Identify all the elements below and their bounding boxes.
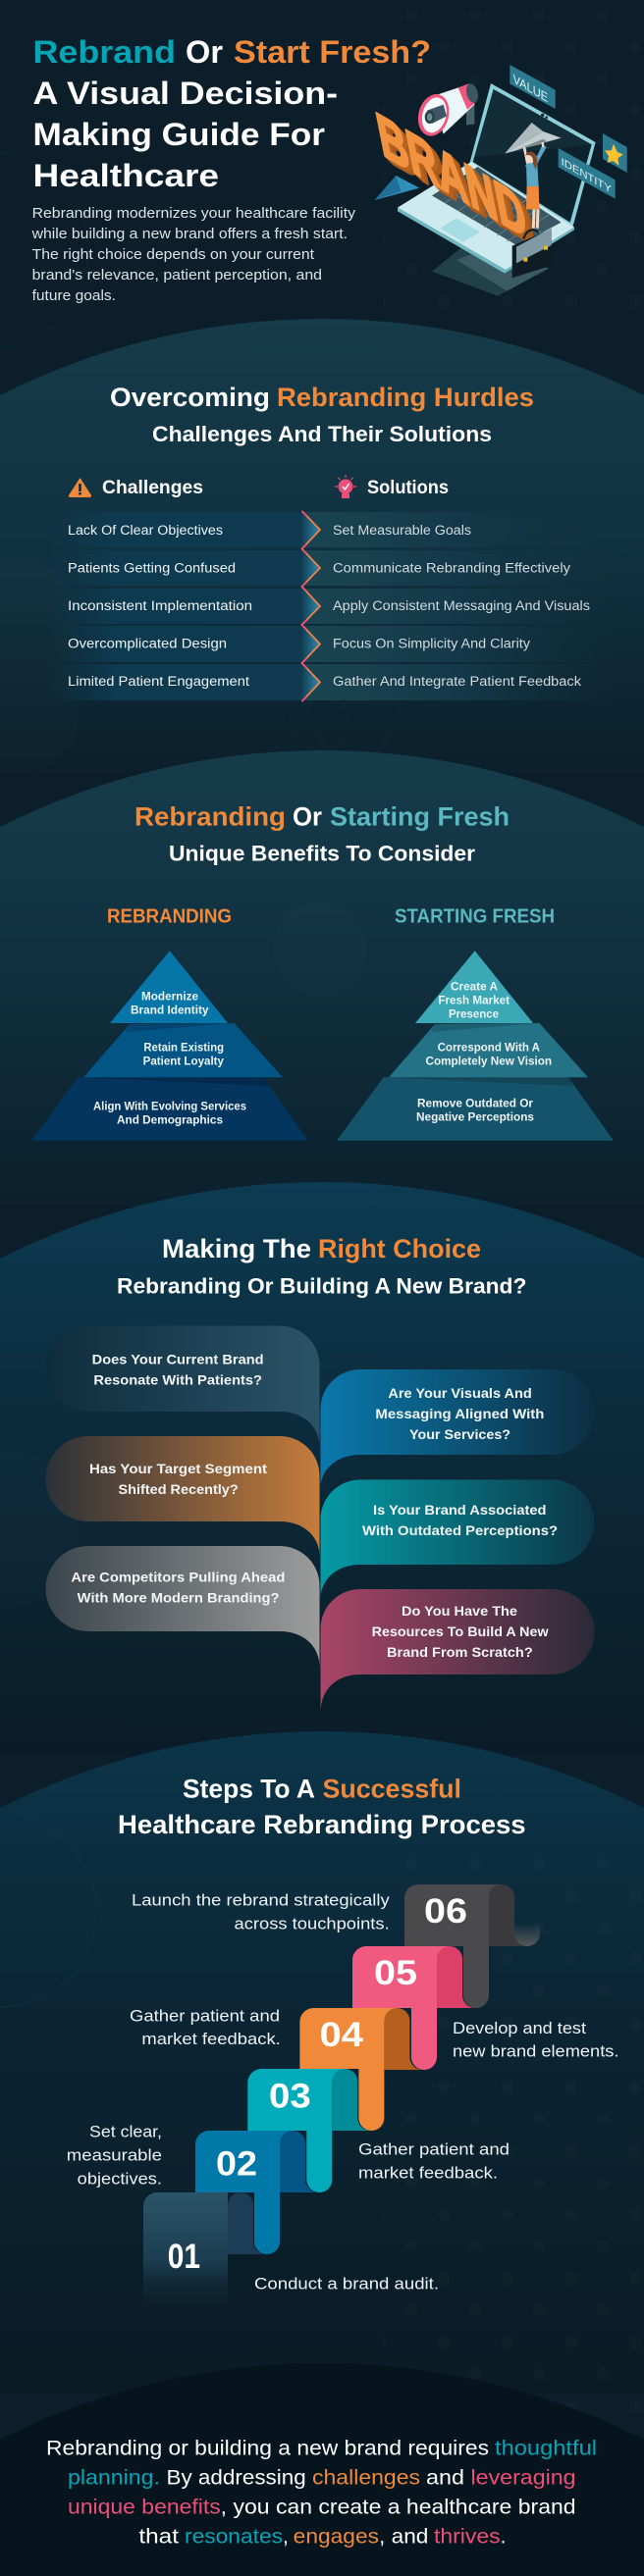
- step text 05: [453, 2020, 618, 2060]
- step text 05: Develop and test: [453, 2020, 586, 2037]
- step 01: 01: [168, 2238, 200, 2276]
- heading: rebranding or starting fresh: Rebranding: [134, 802, 286, 832]
- pyramid tier 3: Align With Evolving Services: [93, 1100, 246, 1113]
- column heading: starting fresh: STARTING FRESH: [395, 906, 555, 928]
- bubble: competitors: Are Competitors Pulling Ahead: [71, 1570, 285, 1585]
- icon: blue paper plane: [375, 176, 419, 200]
- heading: steps to a successful rebranding process: Successful: [322, 1774, 461, 1803]
- intro text block: future goals.: [32, 288, 116, 304]
- step text 02: measurable: [67, 2146, 162, 2164]
- panel: decision section background: [0, 1182, 644, 1756]
- step text 03: market feedback.: [358, 2164, 498, 2182]
- title: Start Fresh?: [234, 34, 431, 70]
- conclusion text block: ,: [283, 2525, 289, 2548]
- bubble: resources: Brand From Scratch?: [387, 1644, 533, 1660]
- conclusion text block: planning.: [68, 2466, 160, 2489]
- step text 06: across touchpoints.: [234, 1915, 390, 1932]
- icon: 3D brand lettering: BRAND: [377, 104, 538, 258]
- intro text block: while building a new brand offers a fresh start.: [31, 227, 348, 242]
- row 3: [49, 589, 615, 624]
- row 1: Set Measurable Goals: [333, 523, 471, 538]
- step text 02: objectives.: [78, 2171, 162, 2189]
- row 4: Focus On Simplicity And Clarity: [333, 637, 530, 651]
- title: Or: [186, 34, 223, 70]
- bubble: competitors: [45, 1546, 319, 1667]
- icon: gray paper plane: [505, 123, 562, 154]
- pyramid tier 1: [110, 951, 228, 1023]
- icon: briefcase: [512, 229, 552, 278]
- bubble: outdated perceptions: With Outdated Perceptions?: [362, 1522, 558, 1538]
- step text 05: new brand elements.: [453, 2042, 618, 2060]
- pyramid tier 1: Presence: [449, 1006, 499, 1020]
- heading: making the right choice: Right Choice: [318, 1234, 481, 1263]
- icon: identity tag: [559, 148, 616, 199]
- heading: overcoming rebranding hurdles: [110, 383, 534, 446]
- pyramid tier 1: Brand Identity: [131, 1003, 209, 1016]
- panel: challenges and solutions table: [49, 475, 615, 701]
- step text 04: Gather patient and: [130, 2007, 280, 2025]
- heading: making the right choice: Rebranding Or Building A New Brand?: [117, 1273, 526, 1299]
- conclusion text block: By addressing: [167, 2466, 306, 2489]
- pyramid tier 2: Correspond With A: [438, 1041, 540, 1055]
- pyramid tier 2: [83, 1023, 283, 1077]
- pyramid tier 2: Completely New Vision: [426, 1055, 552, 1068]
- title: Healthcare: [33, 158, 219, 193]
- bubble: resources: Do You Have The: [402, 1603, 517, 1619]
- step text 04: [130, 2007, 281, 2048]
- conclusion text block: unique benefits: [68, 2496, 221, 2518]
- row 2: Communicate Rebranding Effectively: [333, 561, 570, 576]
- row 5: Limited Patient Engagement: [68, 674, 249, 689]
- column heading: solutions: Solutions: [367, 478, 449, 498]
- title: Rebrand: [33, 34, 176, 70]
- heading: overcoming rebranding hurdles: Overcoming: [110, 383, 270, 412]
- icon: megaphone: [413, 82, 480, 139]
- step 03: [247, 2069, 370, 2192]
- heading: overcoming rebranding hurdles: Rebranding Hurdles: [277, 383, 534, 412]
- heading: overcoming rebranding hurdles: Challenges And Their Solutions: [152, 422, 492, 446]
- pyramid tier 3: And Demographics: [117, 1113, 223, 1127]
- row 4: [49, 626, 615, 662]
- pyramid tier 1: [415, 951, 533, 1023]
- heading: steps to a successful rebranding process: Steps To A: [183, 1774, 315, 1803]
- illustration: laptop with brand lettering: [371, 65, 627, 296]
- conclusion text block: thoughtful: [495, 2437, 597, 2459]
- conclusion text block: [46, 2437, 597, 2548]
- icon: star tag: [603, 133, 627, 173]
- icon: 3D brand lettering: BRAND: [375, 102, 536, 256]
- icon: woman holding plane: [523, 142, 547, 238]
- step 03: 03: [269, 2078, 311, 2115]
- bubble: target segment: Has Your Target Segment: [89, 1461, 267, 1476]
- pyramid tier 2: Patient Loyalty: [143, 1055, 224, 1068]
- step 05: [352, 1946, 475, 2070]
- panel: conclusion section background: [0, 2363, 644, 2576]
- panel: challenges section background: [0, 319, 644, 775]
- heading: steps to a successful rebranding process: [118, 1774, 526, 1839]
- step text 02: Set clear,: [89, 2123, 162, 2140]
- step 02: 02: [216, 2144, 257, 2183]
- step text 02: [67, 2123, 162, 2189]
- bubble: outdated perceptions: Is Your Brand Associated: [373, 1502, 546, 1518]
- step 02: [195, 2131, 318, 2254]
- bubble: target segment: Shifted Recently?: [118, 1481, 239, 1497]
- intro text block: Rebranding modernizes your healthcare facility: [32, 206, 356, 222]
- icon: laptop screen: [469, 83, 596, 228]
- heading: rebranding or starting fresh: [134, 802, 510, 866]
- icon: identity tag: IDENTITY: [562, 156, 612, 196]
- conclusion text block: that: [138, 2525, 179, 2548]
- panel: starting fresh pyramid: [337, 906, 614, 1141]
- pyramid tier 3: Remove Outdated Or: [417, 1096, 533, 1109]
- panel: steps section background: [0, 1731, 644, 2394]
- step text 06: Launch the rebrand strategically: [132, 1892, 391, 1910]
- icon: value tag: VALUE: [513, 72, 548, 105]
- row 5: Gather And Integrate Patient Feedback: [333, 674, 581, 689]
- pyramid tier 1: Fresh Market: [438, 993, 510, 1006]
- conclusion text block: .: [501, 2525, 506, 2548]
- column heading: rebranding: REBRANDING: [107, 906, 232, 928]
- step 06: 06: [424, 1892, 467, 1931]
- step text 03: Gather patient and: [358, 2140, 510, 2158]
- bubble: competitors: With More Modern Branding?: [78, 1589, 279, 1605]
- conclusion text block: , you can create a healthcare brand: [221, 2496, 576, 2518]
- step text 04: market feedback.: [141, 2031, 281, 2048]
- icon: ground shadow: [432, 247, 550, 296]
- pyramid tier 3: Negative Perceptions: [416, 1109, 534, 1123]
- zigzag chevron divider: [302, 511, 320, 701]
- bubble: current brand: Does Your Current Brand: [92, 1352, 264, 1367]
- bubble: resources: Resources To Build A New: [372, 1623, 549, 1639]
- icon: light bulb: [335, 475, 356, 498]
- icon: laptop base: [398, 162, 574, 274]
- row 3: Inconsistent Implementation: [68, 598, 252, 613]
- icon: 3D brand lettering: BRAND: [373, 100, 534, 254]
- icon: warning triangle: [69, 478, 91, 497]
- bubble: visuals and messaging: [320, 1369, 595, 1488]
- row 2: [49, 550, 615, 586]
- panel: benefits section background: [0, 750, 644, 1207]
- row 5: [49, 664, 615, 700]
- conclusion text block: thrives: [434, 2525, 501, 2548]
- conclusion text block: engages: [294, 2525, 379, 2548]
- intro text block: [31, 206, 356, 304]
- step 01: [143, 2192, 266, 2317]
- pyramid tier 1: Modernize: [141, 989, 198, 1003]
- intro text block: brand's relevance, patient perception, and: [32, 268, 322, 283]
- intro text block: The right choice depends on your current: [32, 247, 314, 263]
- bubble: visuals and messaging: Messaging Aligned With: [375, 1406, 544, 1421]
- bubble: visuals and messaging: Are Your Visuals And: [388, 1385, 532, 1401]
- conclusion text block: resonates: [185, 2525, 283, 2548]
- pyramid tier 1: Create A: [451, 979, 498, 993]
- bubble: resources: [320, 1589, 595, 1713]
- icon: value tag: [510, 65, 556, 109]
- conclusion text block: , and: [379, 2525, 428, 2548]
- step text 03: [358, 2140, 510, 2182]
- icon: 3D brand lettering: BRAND: [371, 98, 532, 252]
- conclusion text block: Rebranding or building a new brand requires: [46, 2437, 489, 2459]
- title: A Visual Decision-: [33, 76, 338, 111]
- row 3: Apply Consistent Messaging And Visuals: [333, 598, 590, 613]
- row 1: [49, 512, 615, 547]
- conclusion text block: leveraging: [471, 2466, 576, 2489]
- heading: steps to a successful rebranding process: Healthcare Rebranding Process: [118, 1810, 526, 1839]
- icon: 3D brand lettering: BRAND: [379, 106, 540, 260]
- heading: rebranding or starting fresh: Starting Fresh: [330, 802, 510, 832]
- pyramid tier 2: Retain Existing: [143, 1041, 224, 1055]
- step 05: 05: [374, 1954, 417, 1992]
- step 04: 04: [320, 2016, 364, 2054]
- conclusion text block: and: [426, 2466, 464, 2489]
- step 06: [404, 1884, 540, 2008]
- heading: rebranding or starting fresh: Unique Benefits To Consider: [169, 842, 475, 866]
- title: Making Guide For: [33, 117, 325, 152]
- conclusion text block: challenges: [312, 2466, 420, 2489]
- heading: rebranding or starting fresh: Or: [293, 802, 322, 832]
- step text 06: [132, 1892, 391, 1932]
- bubble: current brand: [45, 1326, 319, 1447]
- bubble: current brand: Resonate With Patients?: [93, 1371, 262, 1387]
- panel: rebranding pyramid: [31, 906, 308, 1141]
- heading: making the right choice: [117, 1234, 526, 1299]
- chart: staircase ribbon steps: [67, 1884, 619, 2317]
- bubble: outdated perceptions: [320, 1479, 594, 1599]
- pyramid tier 3: [337, 1077, 614, 1141]
- heading: making the right choice: Making The: [162, 1234, 311, 1263]
- pyramid tier 3: [31, 1077, 308, 1141]
- row 4: Overcomplicated Design: [68, 637, 227, 651]
- bubble: visuals and messaging: Your Services?: [409, 1426, 510, 1442]
- step 04: [299, 2008, 422, 2131]
- bubble: target segment: [45, 1436, 319, 1556]
- column heading: challenges: Challenges: [102, 478, 203, 498]
- panel: decision question bubbles: [45, 1326, 594, 1713]
- row 1: Lack Of Clear Objectives: [68, 523, 223, 538]
- row 2: Patients Getting Confused: [68, 561, 236, 576]
- title: [33, 34, 431, 193]
- step text 01: Conduct a brand audit.: [254, 2275, 439, 2293]
- pyramid tier 2: [389, 1023, 588, 1077]
